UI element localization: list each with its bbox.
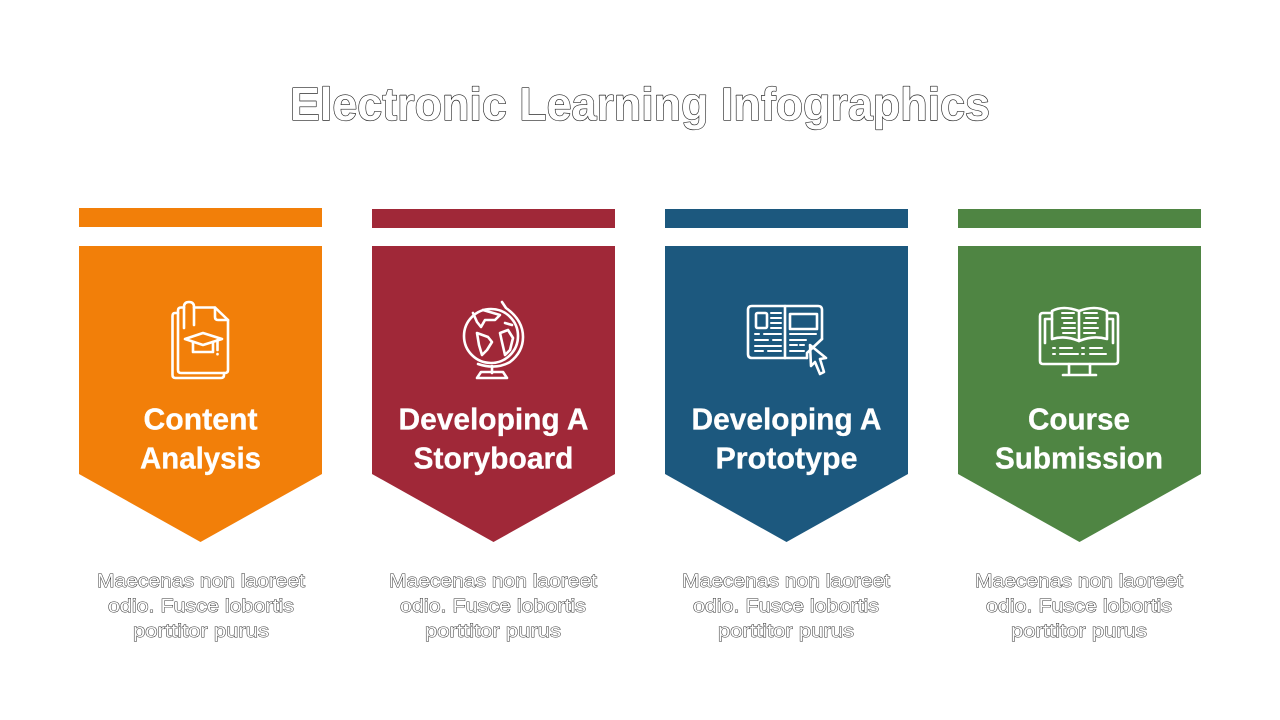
description: porttitor purus (1011, 620, 1147, 641)
heading: Content (144, 402, 258, 436)
description: Maecenas non laoreet (682, 570, 890, 591)
icon: document with graduation cap (172, 302, 228, 378)
description: Maecenas non laoreet (97, 570, 305, 591)
heading (995, 402, 1163, 476)
icon: book on monitor (1040, 308, 1118, 375)
description (97, 570, 305, 641)
heading: Course (1028, 402, 1130, 436)
description: porttitor purus (425, 620, 561, 641)
heading: Developing A (692, 402, 882, 436)
panel: developing a storyboard (372, 209, 615, 641)
heading: Developing A (398, 402, 588, 436)
description: odio. Fusce lobortis (108, 595, 294, 616)
top bar (79, 208, 322, 227)
panel: course submission (958, 209, 1201, 641)
banner (79, 246, 322, 542)
heading: Storyboard (414, 442, 574, 476)
heading: Submission (995, 442, 1163, 476)
banner (665, 246, 908, 542)
heading: Prototype (716, 442, 858, 476)
top bar (372, 209, 615, 228)
top bar (665, 209, 908, 228)
description: Maecenas non laoreet (975, 570, 1183, 591)
description (389, 570, 597, 641)
description: porttitor purus (133, 620, 269, 641)
icon: e-book with cursor (748, 306, 826, 374)
description: odio. Fusce lobortis (986, 595, 1172, 616)
banner (372, 246, 615, 542)
panel: content analysis (79, 208, 322, 641)
description (975, 570, 1183, 641)
icon: globe (464, 302, 523, 378)
panel: developing a prototype (665, 209, 908, 641)
top bar (958, 209, 1201, 228)
description: porttitor purus (718, 620, 854, 641)
title: Electronic Learning Infographics (290, 78, 990, 130)
description (682, 570, 890, 641)
description: odio. Fusce lobortis (400, 595, 586, 616)
description: Maecenas non laoreet (389, 570, 597, 591)
heading: Analysis (140, 442, 261, 476)
description: odio. Fusce lobortis (693, 595, 879, 616)
heading (140, 402, 261, 476)
banner (958, 246, 1201, 542)
heading (692, 402, 882, 476)
heading (398, 402, 588, 476)
